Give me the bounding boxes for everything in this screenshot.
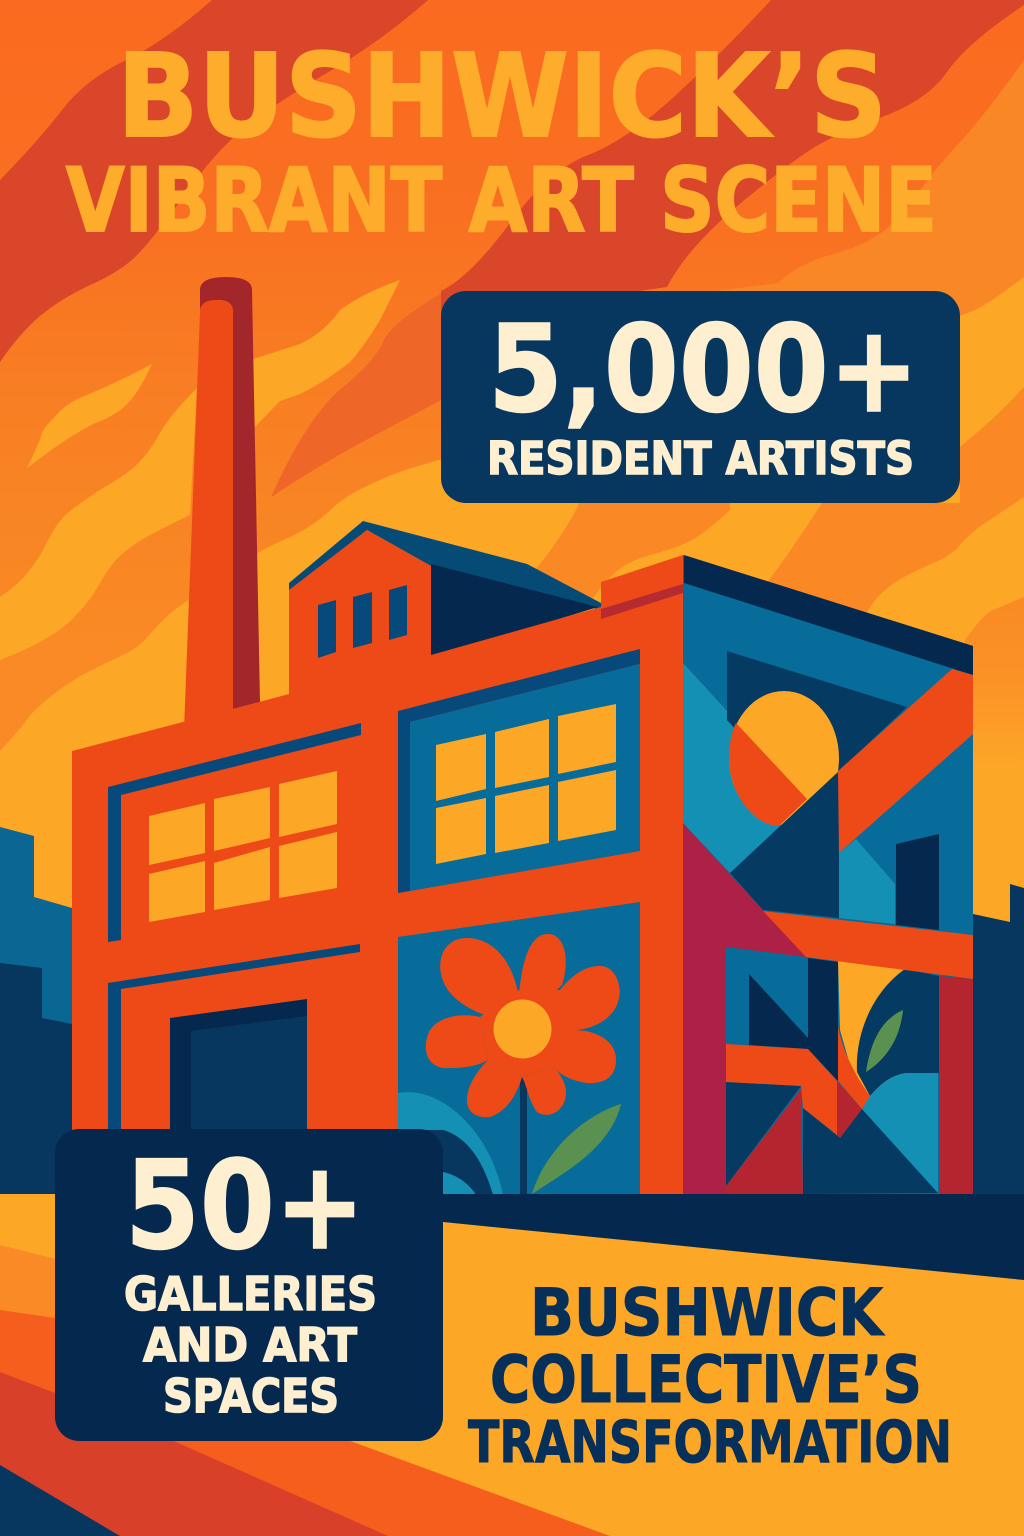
upper left window	[108, 723, 361, 942]
callout: galleries	[55, 1129, 443, 1441]
title	[66, 30, 937, 252]
footer heading: COLLECTIVE’S	[490, 1343, 922, 1418]
leaf	[532, 1104, 621, 1194]
flower stem	[520, 1070, 527, 1195]
skyline silhouettes	[0, 827, 1024, 1195]
flower mural	[398, 902, 640, 1195]
flower centre	[494, 1000, 552, 1058]
callout: resident artists: RESIDENT ARTISTS	[487, 432, 914, 485]
title: BUSHWICK’S	[117, 30, 887, 164]
callout: resident artists: 5,000+	[488, 301, 919, 440]
flower petals	[426, 934, 620, 1117]
callout: galleries: SPACES	[163, 1369, 339, 1423]
callout: galleries: AND ART	[143, 1318, 358, 1372]
factory building front	[72, 521, 683, 1195]
geometric side mural	[683, 555, 973, 1195]
navy ground strip	[400, 1194, 1024, 1280]
chimney	[184, 277, 260, 730]
footer heading	[468, 1276, 952, 1476]
callout: galleries: GALLERIES	[124, 1267, 377, 1321]
footer heading: BUSHWICK	[530, 1276, 885, 1351]
roof of upper tower	[289, 521, 601, 658]
tower vents	[318, 585, 407, 658]
foreground stripes	[0, 1194, 1024, 1536]
upper right window	[398, 649, 640, 893]
callout: galleries: 50+	[125, 1135, 365, 1277]
doorway	[108, 944, 360, 1195]
mural leaf	[866, 1010, 903, 1072]
brick facade	[72, 530, 683, 1195]
callout: resident artists	[441, 291, 960, 503]
